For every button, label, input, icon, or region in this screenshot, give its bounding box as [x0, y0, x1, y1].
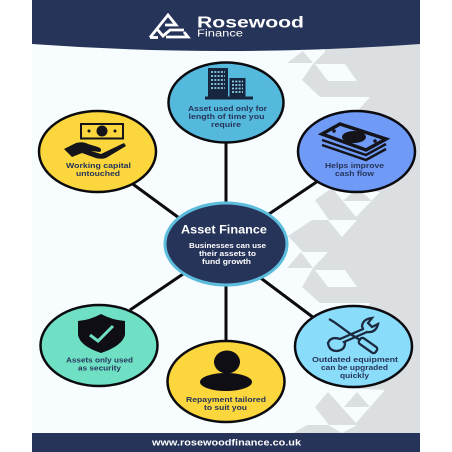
logo wordmark: Rosewood: [197, 14, 304, 32]
node: outdated equipment upgraded quickly: quickly: [340, 371, 370, 380]
node: center Asset Finance: [165, 203, 287, 285]
node text: Working capital: [66, 161, 131, 170]
node text: Outdated equipment: [312, 355, 399, 364]
icon: stack of banknotes: [322, 124, 386, 160]
node: center Asset Finance: their assets to: [199, 249, 256, 258]
logo: Rosewood Finance: [150, 14, 304, 40]
node text: Repayment tailored: [186, 395, 266, 404]
icon: office buildings: [205, 68, 253, 100]
icon: person: [200, 350, 252, 391]
node: assets only used as security: [40, 305, 158, 386]
logo mark: [150, 15, 188, 38]
node: working capital untouched: [39, 111, 156, 192]
node text: Assets only used: [66, 356, 133, 364]
node: working capital untouched: untouched: [76, 169, 120, 178]
node: asset used only for length of time: [168, 62, 284, 142]
node text: Helps improve: [325, 161, 384, 170]
icon: shield with check: [78, 314, 125, 353]
node: asset used only for length of time: length of time you: [188, 112, 265, 121]
center heading: Asset Finance: [181, 222, 267, 236]
icon: crossed wrench and screwdriver: [328, 318, 378, 354]
node: center Asset Finance: fund growth: [202, 257, 251, 266]
node: asset used only for length of time: require: [211, 120, 241, 129]
logo subtitle: Finance: [197, 28, 244, 40]
node: helps improve cash flow: [298, 111, 415, 192]
node: helps improve cash flow: cash flow: [335, 169, 374, 178]
footer banner: [32, 433, 420, 452]
node: assets only used as security: as security: [78, 364, 122, 372]
center text: Businesses can use: [189, 241, 266, 250]
icon: hand holding money: [64, 124, 126, 159]
footer website address: www.rosewoodfinance.co.uk: [151, 438, 302, 448]
header banner: [32, 0, 420, 51]
node: repayment tailored to suit you: to suit you: [204, 403, 247, 412]
node: outdated equipment upgraded quickly: [295, 306, 412, 387]
node: outdated equipment upgraded quickly: can be upgraded: [321, 363, 388, 372]
connector lines: [130, 140, 318, 343]
node: repayment tailored to suit you: [168, 341, 284, 422]
node text: Asset used only for: [188, 104, 267, 113]
